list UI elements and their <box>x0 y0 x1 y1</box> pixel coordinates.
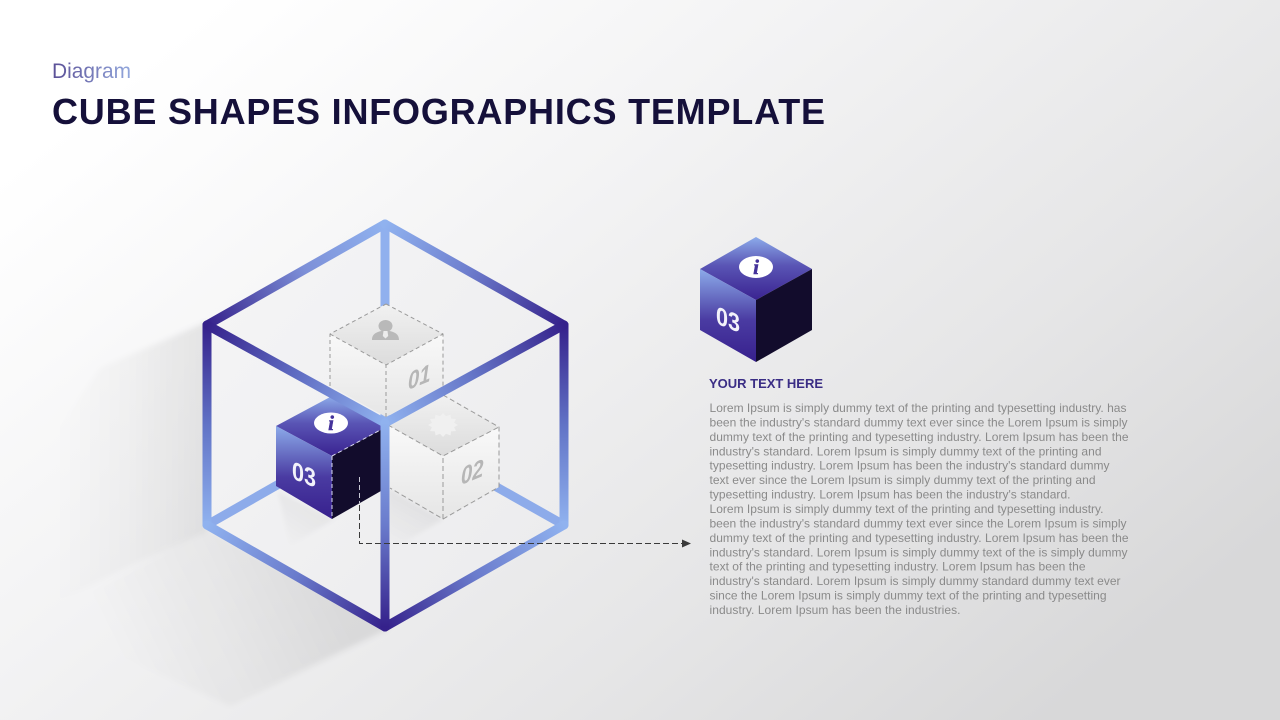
back edges of wireframe <box>207 224 564 525</box>
icon: person <box>372 320 399 340</box>
wireframe cube with inner cubes <box>207 224 564 627</box>
body text: text of the printing and typesetting industry. Lorem Ipsum has been the <box>710 560 1086 574</box>
icon: info: i <box>753 255 759 279</box>
body text: industry's standard. Lorem Ipsum is simply dummy text of the printing and <box>710 444 1102 458</box>
cube 01 <box>330 304 443 417</box>
body text: typesetting industry. Lorem Ipsum has been the industry's standard. <box>710 488 1070 502</box>
number 03: 03 <box>292 457 316 494</box>
heading: your text here: YOUR TEXT HERE <box>709 376 823 391</box>
arrow: dashed connector <box>360 477 691 548</box>
body text: Lorem Ipsum is simply dummy text of the printing and typesetting industry. has <box>710 401 1126 415</box>
icon: gear <box>428 413 458 437</box>
number 03: 03 <box>716 302 740 339</box>
icon: info: i <box>328 411 334 435</box>
body text: been the industry's standard dummy text ever since the Lorem Ipsum is simply <box>710 415 1128 429</box>
glass interior of cube <box>207 224 564 627</box>
body text: typesetting industry. Lorem Ipsum has been the industry's standard dummy <box>710 459 1110 473</box>
cube 03 highlighted <box>276 396 388 519</box>
detail cube 03 <box>700 237 812 362</box>
number 02: 02 <box>461 453 484 490</box>
subtitle: Diagram <box>52 60 131 83</box>
body text: been the industry's standard dummy text ever since the Lorem Ipsum is simply <box>710 516 1126 530</box>
body text: dummy text of the printing and typesetting industry. Lorem Ipsum has been the <box>710 531 1129 545</box>
number 01: 01 <box>408 359 431 395</box>
body text: dummy text of the printing and typesetting industry. Lorem Ipsum has been the <box>710 430 1129 444</box>
title: CUBE SHAPES INFOGRAPHICS TEMPLATE <box>52 91 825 132</box>
body text: since the Lorem Ipsum is simply dummy text of the printing and typesetting <box>710 589 1106 603</box>
body text: Lorem Ipsum is simply dummy text of the printing and typesetting industry. <box>710 502 1104 516</box>
body text: industry's standard. Lorem Ipsum is simply dummy text of the is simply dummy <box>710 545 1128 559</box>
body text <box>710 401 1129 617</box>
front and outer edges of wireframe <box>207 224 564 627</box>
cube 02 <box>388 395 499 519</box>
cube shadows on floor <box>278 488 443 546</box>
body text: industry's standard. Lorem Ipsum is simply dummy standard dummy text ever <box>710 574 1120 588</box>
large cube shadow <box>40 322 390 706</box>
body text: text ever since the Lorem Ipsum is simply dummy text of the printing and <box>710 473 1096 487</box>
body text: industry. Lorem Ipsum has been the industries. <box>710 603 960 617</box>
